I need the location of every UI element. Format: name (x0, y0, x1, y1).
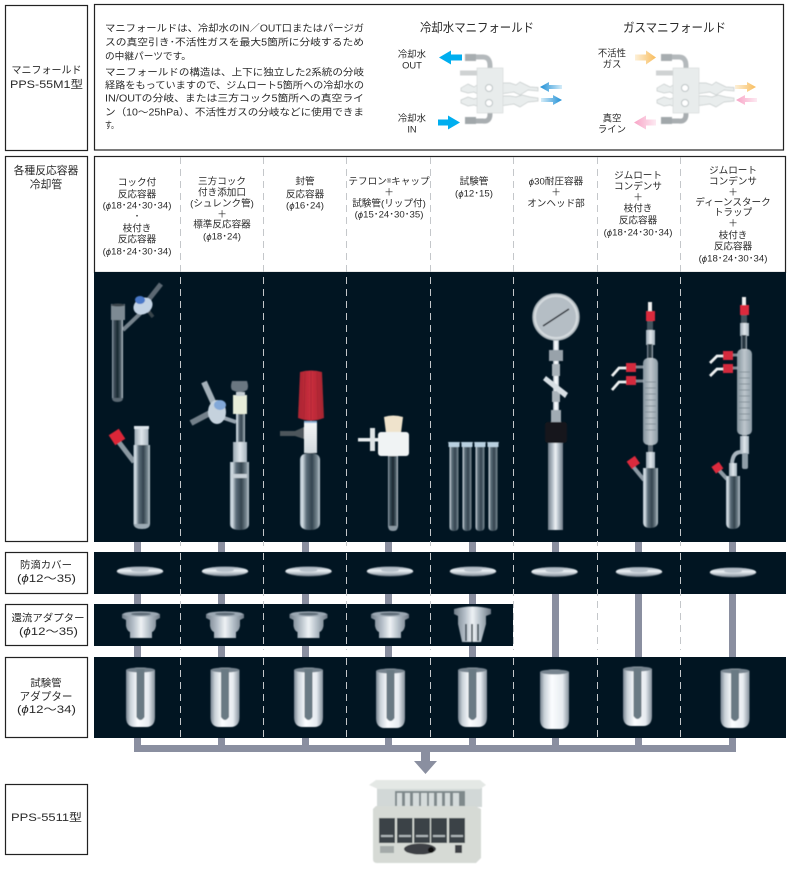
column heading: cock reaction vessels: 枝付き (123, 222, 151, 234)
heading: cooling water manifold: 冷却水マニフォールド (420, 21, 534, 35)
column heading: Dean-Stark: ＋ (728, 218, 738, 230)
column heading: Dean-Stark: (ϕ18･24･30･34) (699, 254, 767, 264)
column heading: Dean-Stark (695, 166, 771, 264)
column heading: Dean-Stark: ＋ (728, 188, 738, 198)
diagram: cooling water manifold (398, 48, 562, 134)
panel: manifold label: マニフォールド (12, 66, 82, 76)
column heading: test tube (455, 176, 493, 200)
column heading: three-way cock: 標準反応容器 (193, 218, 251, 230)
column heading: cock reaction vessels: ･ (135, 212, 139, 222)
panel: PPS-5511 label: PPS-5511型 (11, 811, 82, 824)
panel: vessel header (94, 156, 786, 272)
column heading: Dean-Stark: 枝付き (719, 230, 747, 242)
panel: drip cover label: 防滴カバー (20, 558, 72, 572)
column heading: Dean-Stark: ディーンスターク (695, 196, 771, 208)
text block: manifold description: の中継パーツです。 (105, 50, 191, 62)
panel: reflux adapter label (6, 604, 88, 646)
column heading: Dimroth condenser: ジムロート (614, 170, 662, 182)
column heading: cock reaction vessels: (ϕ18･24･30･34) (103, 246, 171, 258)
arrow: vacuum out (634, 116, 656, 130)
column heading: pressure vessel: オンヘッド部 (527, 198, 585, 210)
column heading: Dimroth condenser (604, 170, 672, 238)
panel: PPS-5511 label (6, 784, 88, 854)
column heading: sealed tube: 封管 (295, 176, 315, 188)
device: PPS-5511 (369, 780, 486, 863)
panel: test tube adapter label: (ϕ12～34) (17, 704, 76, 716)
diagram: gas manifold: 不活性 (598, 48, 626, 58)
arrow: water in (438, 116, 460, 130)
panel: test tube adapter label (6, 658, 88, 738)
column heading: three-way cock (190, 176, 254, 242)
diagram: cooling water manifold: OUT (402, 60, 422, 70)
row: reflux adapters (122, 606, 491, 642)
column heading: teflon cap: 試験管(リップ付) (352, 198, 426, 210)
panel: vessel photo band (94, 272, 786, 542)
text block: manifold description: ン（10～25hPa）、不活性ガスの分岐などに使用できま (105, 106, 364, 118)
column heading: cock reaction vessels (103, 178, 171, 258)
column heading: three-way cock: (ϕ18･24) (203, 232, 241, 242)
panel: drip cover label: (ϕ12～35) (17, 573, 76, 585)
column heading: Dean-Stark: 反応容器 (714, 240, 753, 252)
column heading: Dimroth condenser: ＋ (633, 192, 643, 204)
vessel: pressure vessel with gauge (533, 294, 579, 530)
arrow: water out (439, 50, 462, 64)
column heading: three-way cock: (シュレンク管) (190, 198, 254, 210)
panel: test tube adapter label: 試験管 (30, 676, 62, 690)
column heading: Dimroth condenser: (ϕ18･24･30･34) (604, 228, 672, 238)
column heading: sealed tube (286, 176, 325, 212)
arrow: branch return (540, 82, 562, 92)
adapter: finned adapter (454, 606, 491, 642)
arrow: branch feed (541, 95, 562, 105)
vessel: Dimroth condenser with Dean-Stark trap (710, 297, 752, 529)
text block: manifold description: マニフォールドの構造は、上下に独立した2系統の分岐 (105, 66, 364, 78)
column heading: Dean-Stark: ジムロート (709, 166, 757, 176)
diagram: cooling water manifold: 冷却水 (398, 112, 427, 124)
vessel: four test tubes (448, 442, 499, 531)
vessel: branched reaction vessel (109, 426, 150, 529)
column heading: three-way cock: ＋ (217, 210, 227, 220)
diagram: cooling water manifold: 冷却水 (398, 48, 427, 60)
panel: test tube adapter label: アダプター (20, 690, 72, 703)
column heading: teflon cap (348, 176, 430, 220)
arrow: down to PPS-5511 (414, 752, 437, 774)
column heading: pressure vessel: ϕ30耐圧容器 (529, 176, 584, 188)
text block: manifold description: す。 (105, 120, 118, 132)
column heading: Dimroth condenser: 反応容器 (619, 214, 658, 226)
column heading: test tube: (ϕ12･15) (455, 188, 493, 200)
column heading: sealed tube: (ϕ16･24) (286, 200, 324, 212)
panel: manifold description (94, 4, 784, 150)
panel: reaction vessel label: 各種反応容器 (14, 163, 79, 177)
text block: manifold description: スの真空引き･不活性ガスを最大5箇所に分岐するため (105, 36, 364, 48)
column heading: sealed tube: 反応容器 (286, 188, 325, 200)
diagram: gas manifold (598, 48, 757, 134)
diagram: cooling water manifold: IN (407, 124, 417, 134)
vessel: Dimroth condenser with branched vessel (612, 302, 658, 528)
panel: reaction vessel label: 冷却管 (30, 177, 62, 191)
panel: reflux adapter band (94, 604, 513, 646)
column heading: pressure vessel: ＋ (551, 188, 561, 198)
panel: manifold label: PPS-55M1型 (10, 78, 83, 91)
panel: drip cover label (6, 552, 88, 594)
column heading: teflon cap: (ϕ15･24･30･35) (355, 210, 423, 220)
column heading: cock reaction vessels: 反応容器 (118, 188, 157, 200)
panel: reflux adapter label: (ϕ12～35) (19, 626, 78, 638)
diagram: gas manifold: ライン (598, 124, 626, 134)
row: drip covers (116, 566, 756, 578)
diagram: gas manifold: ガス (603, 58, 621, 70)
column heading: test tube: 試験管 (460, 176, 489, 188)
connector: horizontal grey bar (134, 745, 736, 752)
arrow: inert gas branch (735, 82, 756, 92)
connector: vertical grey bars (134, 542, 736, 746)
column heading: three-way cock: 付き添加口 (198, 188, 246, 198)
column heading: cock reaction vessels: 反応容器 (118, 234, 157, 246)
panel: drip cover band (94, 552, 786, 594)
column heading: teflon cap: テフロン®キャップ (348, 176, 430, 188)
text block: manifold description: 経路をもっていますので、ジムロート5箇所への冷却水の (105, 78, 364, 92)
vessel: cock reaction vessel (111, 284, 161, 402)
arrow: inert gas in (635, 50, 656, 64)
column heading: cock reaction vessels: コック付 (118, 178, 157, 188)
text block: manifold description: IN/OUTの分岐、または三方コック5箇所への真空ライ (105, 92, 364, 104)
column heading: Dimroth condenser: 枝付き (624, 202, 652, 214)
panel: reaction vessel label (6, 156, 88, 542)
column heading: teflon cap: ＋ (384, 188, 394, 198)
column heading: cock reaction vessels: (ϕ18･24･30･34) (103, 200, 171, 212)
row: test tube adapters (126, 666, 750, 729)
column heading: Dean-Stark: コンデンサ (709, 176, 757, 188)
vessel: sealed tube with red cap (280, 370, 324, 530)
column heading: three-way cock: 三方コック (198, 176, 246, 188)
column heading: Dean-Stark: トラップ (714, 208, 753, 218)
vessel: three-way cock Schlenk (191, 381, 249, 530)
text block: manifold description (105, 22, 364, 132)
arrow: vacuum branch (736, 95, 757, 105)
column heading: Dimroth condenser: コンデンサ (614, 180, 662, 192)
diagram: gas manifold: 真空 (603, 112, 621, 124)
panel: test tube adapter band (94, 657, 786, 738)
text block: manifold description: マニフォールドは、冷却水のIN／OUT口またはパージガ (105, 22, 364, 34)
panel: reflux adapter label: 還流アダプター (12, 612, 84, 624)
panel: manifold label (6, 6, 88, 150)
vessel: teflon cap test tube (358, 416, 409, 531)
column heading: pressure vessel (527, 176, 585, 210)
heading: gas manifold: ガスマニフォールド (623, 21, 726, 35)
